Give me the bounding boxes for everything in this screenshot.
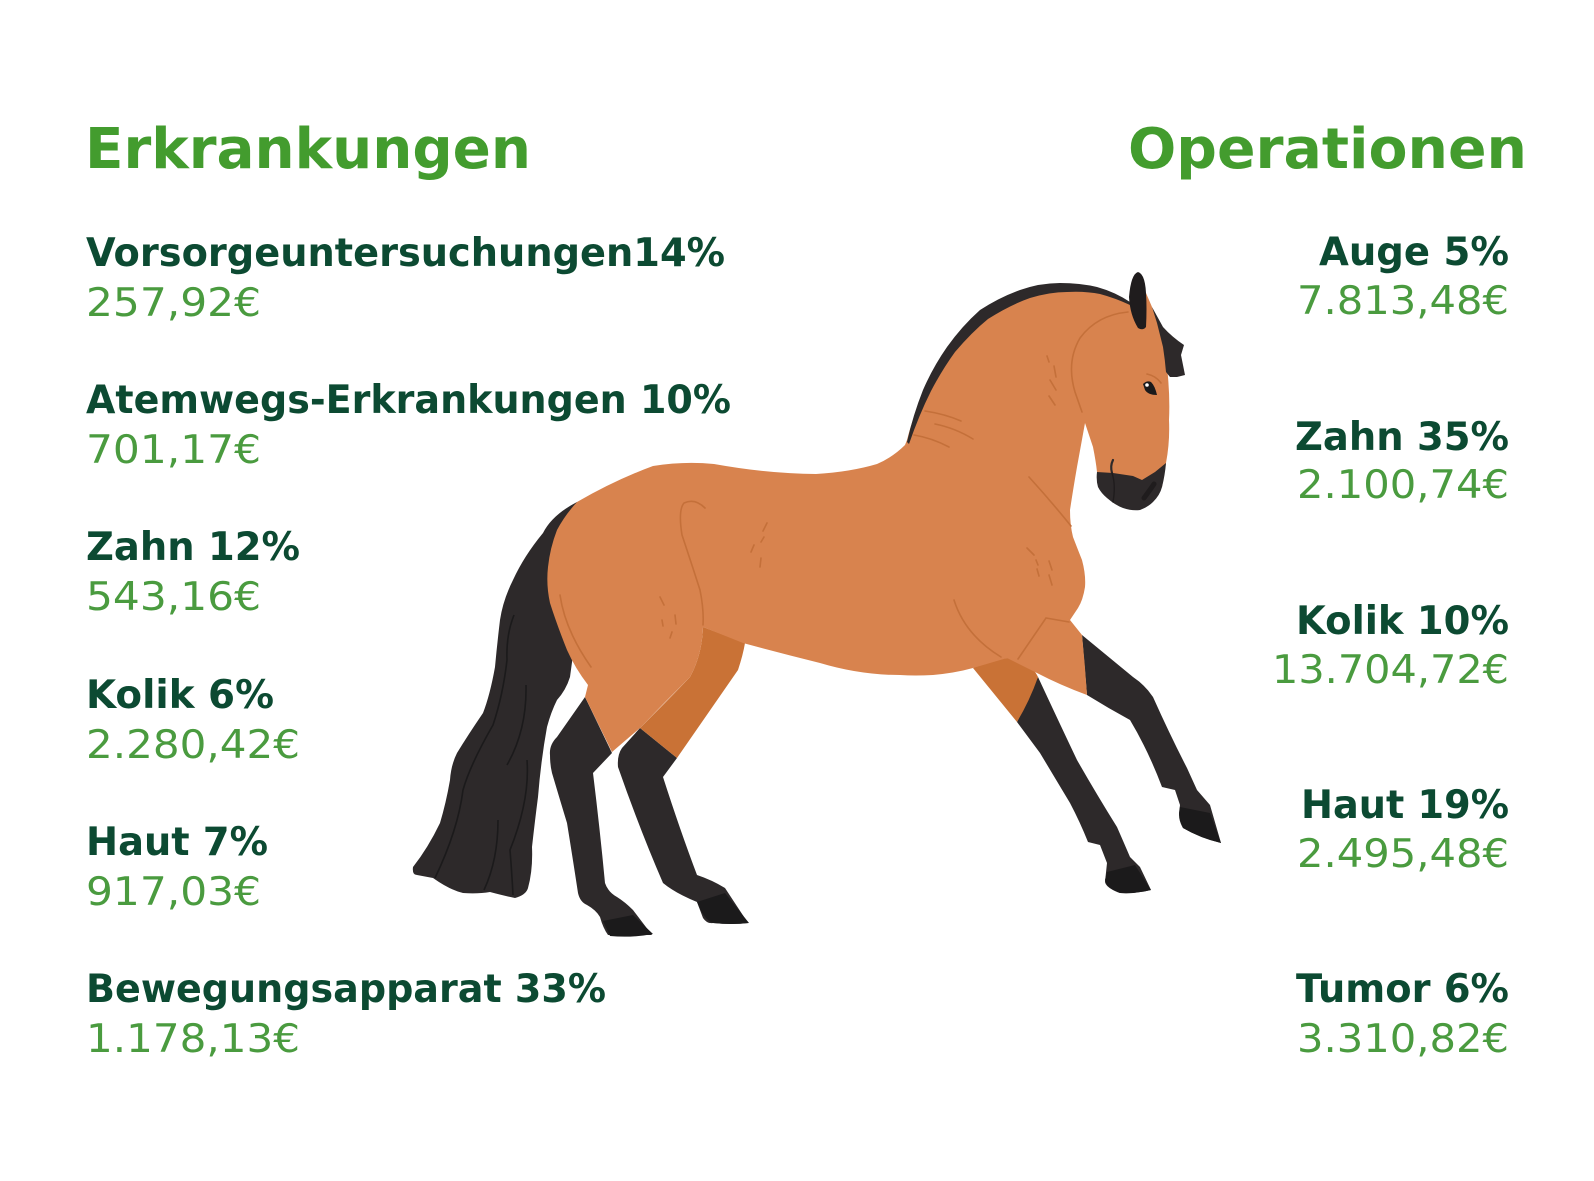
row: Kolik (1272, 599, 1509, 693)
hind leg rear (550, 697, 653, 937)
illustration: horse (413, 272, 1221, 937)
front leg shading (973, 658, 1038, 722)
body and head (547, 287, 1169, 752)
upper leg shading (640, 627, 745, 758)
row: Haut: 2.495,48€ (1297, 832, 1509, 877)
row: Vorsorgeuntersuchungen: Vorsorgeuntersuchungen14% (86, 231, 725, 276)
row: Haut: Haut 7% (86, 820, 268, 865)
hind leg front (618, 728, 749, 924)
row: Zahn (1295, 415, 1509, 508)
row: Zahn: Zahn 35% (1295, 415, 1509, 460)
row: Vorsorgeuntersuchungen: 257,92€ (86, 281, 261, 326)
row: Haut (86, 820, 268, 915)
row: Kolik: 13.704,72€ (1272, 648, 1509, 693)
heading: Operationen: Operationen (1128, 117, 1527, 182)
front leg lower (1017, 677, 1151, 893)
row: Zahn: 543,16€ (86, 575, 261, 620)
row: Zahn: 2.100,74€ (1297, 463, 1509, 508)
row: Kolik: Kolik 10% (1296, 599, 1509, 644)
row: Bewegungsapparat: 1.178,13€ (86, 1017, 300, 1062)
row: Bewegungsapparat: Bewegungsapparat 33% (86, 967, 606, 1012)
heading: Erkrankungen: Erkrankungen (85, 117, 531, 182)
row: Haut: 917,03€ (86, 870, 261, 915)
row: Atemwegs-Erkrankungen (86, 378, 731, 473)
tail (413, 502, 577, 898)
row: Kolik: Kolik 6% (86, 673, 274, 718)
muzzle details (1111, 460, 1154, 502)
row: Kolik: 2.280,42€ (86, 723, 300, 768)
body contour lines (560, 312, 1161, 667)
row: Auge: Auge 5% (1319, 230, 1509, 275)
row: Atemwegs-Erkrankungen: Atemwegs-Erkrankungen 10% (86, 378, 731, 423)
ear (1129, 272, 1146, 329)
front leg raised (1082, 635, 1221, 843)
panel: Erkrankungen (85, 117, 731, 1062)
row: Haut (1297, 783, 1509, 877)
row: Auge (1297, 230, 1509, 324)
row: Tumor: Tumor 6% (1296, 967, 1509, 1012)
mane (907, 283, 1130, 444)
row: Bewegungsapparat (86, 967, 606, 1062)
eye (1143, 381, 1157, 395)
row: Vorsorgeuntersuchungen (86, 231, 725, 326)
row: Haut: Haut 19% (1301, 783, 1509, 828)
forelock (1152, 307, 1185, 377)
row: Auge: 7.813,48€ (1297, 279, 1509, 324)
row: Tumor (1296, 967, 1509, 1062)
row: Kolik (86, 673, 300, 768)
muzzle (1097, 463, 1166, 510)
row: Zahn: Zahn 12% (86, 525, 300, 570)
row: Tumor: 3.310,82€ (1297, 1017, 1509, 1062)
row: Zahn (86, 525, 300, 620)
row: Atemwegs-Erkrankungen: 701,17€ (86, 428, 261, 473)
panel: Operationen (1128, 117, 1527, 1062)
